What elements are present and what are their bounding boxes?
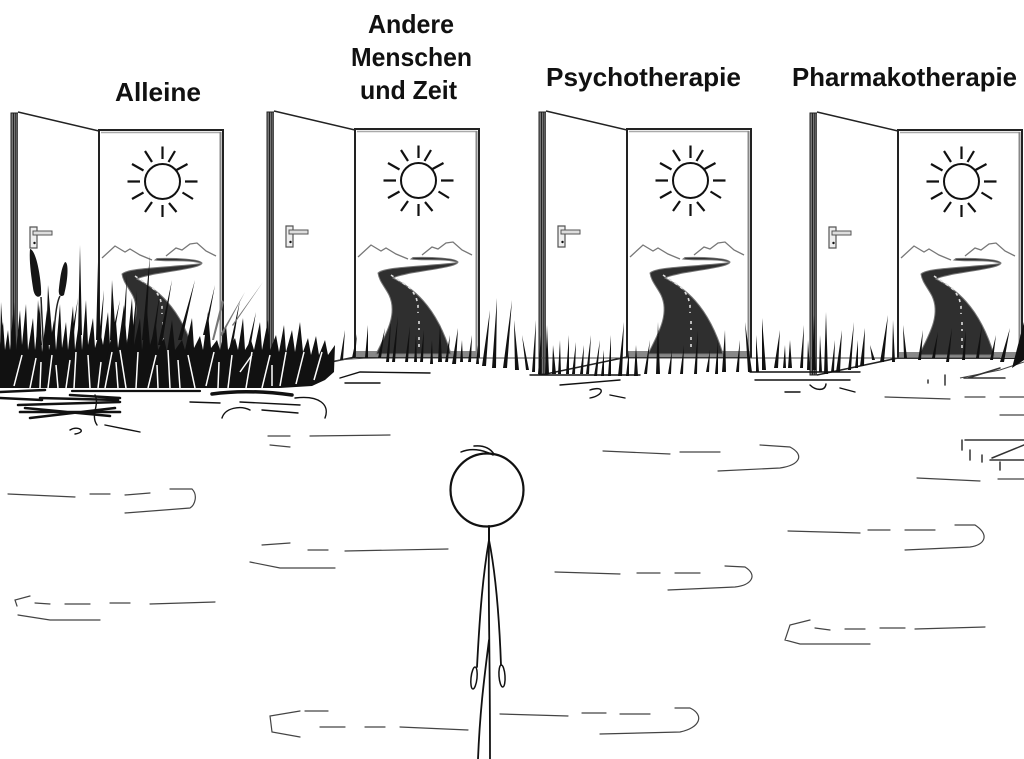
title: Andere Menschen und Zeit: Andere — [368, 9, 454, 39]
puddle lines — [8, 397, 1024, 737]
reeds along doors — [340, 298, 1024, 376]
water reflections — [0, 368, 1024, 470]
door: Pharmakotherapie — [810, 112, 1022, 375]
door: Alleine — [11, 112, 223, 375]
stick figure — [450, 446, 524, 759]
title: Andere Menschen und Zeit: und Zeit — [360, 75, 457, 105]
reed clump white slashes — [14, 350, 322, 388]
reed clump left — [0, 245, 335, 388]
title: Alleine: Alleine — [115, 77, 201, 107]
title: Andere Menschen und Zeit — [351, 9, 472, 105]
title: Pharmakotherapie: Pharmakotherapie — [792, 62, 1017, 92]
title: Psychotherapie: Psychotherapie — [546, 62, 741, 92]
door: Psychotherapie — [539, 111, 751, 374]
door: Andere Menschen und Zeit — [267, 111, 479, 374]
title: Andere Menschen und Zeit: Menschen — [351, 42, 472, 72]
horizon line — [330, 358, 1024, 378]
cattails — [30, 249, 68, 380]
